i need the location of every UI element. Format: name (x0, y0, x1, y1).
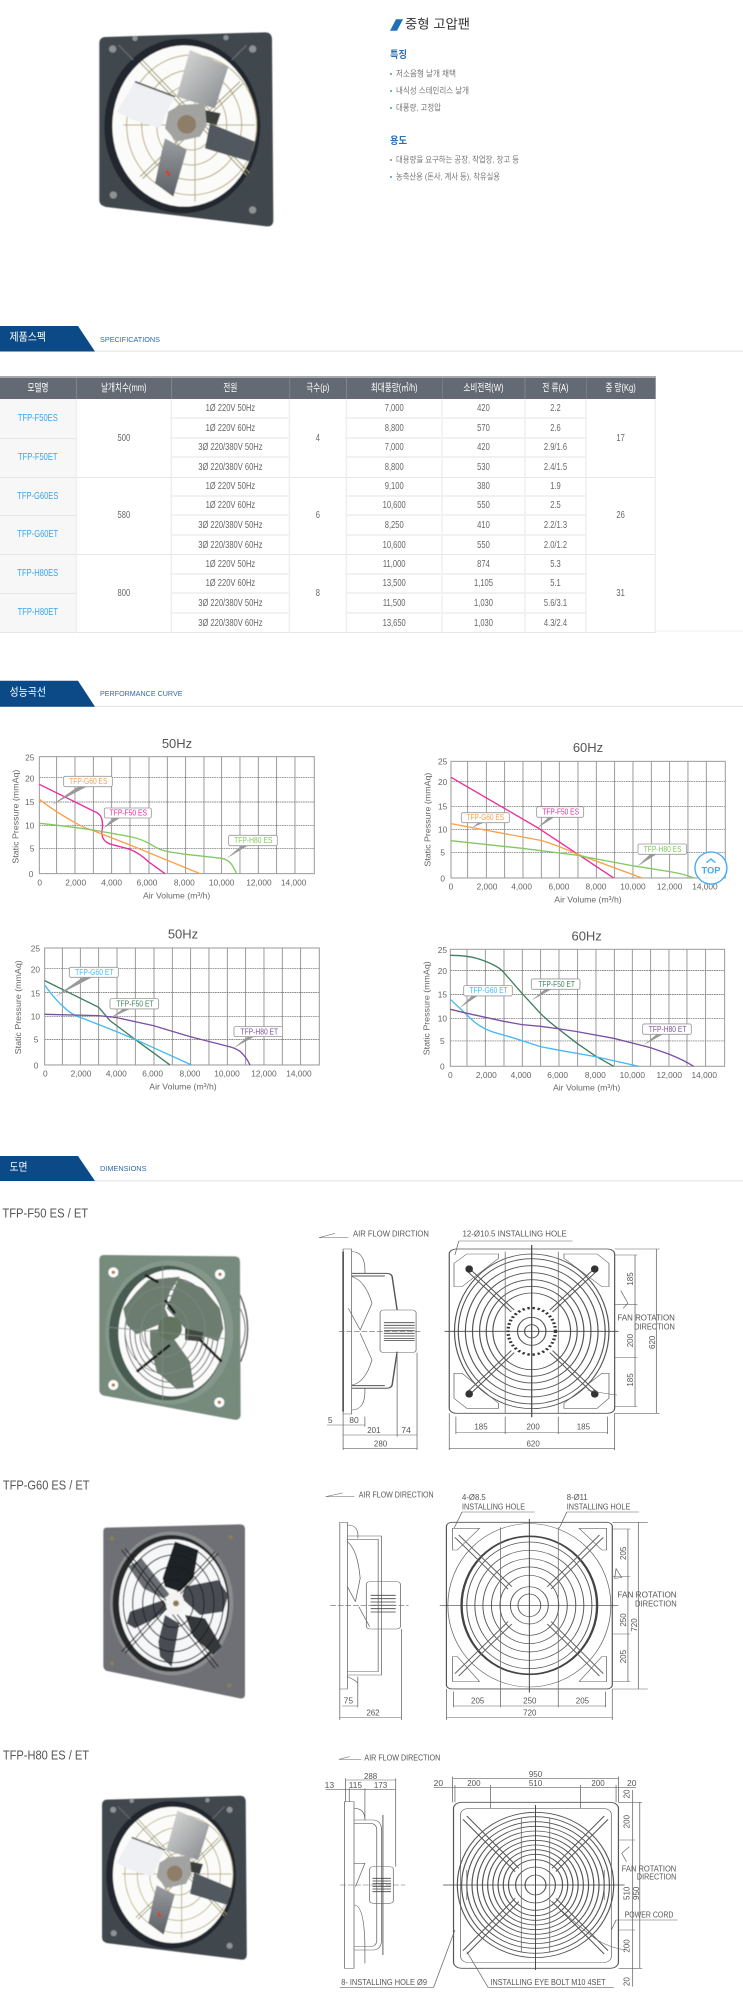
air flow label (339, 1754, 440, 1763)
front view drawing: 8- INSTALLING HOLE Ø9 (341, 1979, 427, 1987)
side view drawing: 280 (374, 1440, 387, 1449)
table header row: 4.3/2.4 (544, 616, 567, 628)
table header row: 최대풍량(㎥/h) (371, 382, 418, 394)
front view drawing: 950 (529, 1771, 542, 1779)
line chart: 60Hz ET: 20 (438, 966, 447, 976)
line chart: 60Hz ET: 4,000 (511, 1070, 532, 1080)
table header row: 11,500 (383, 597, 405, 609)
callout: TFP-F50 ET: TFP-F50 ET (538, 980, 575, 989)
line chart: 60Hz ET: 6,000 (547, 1070, 568, 1080)
front view drawing: 20 (621, 1789, 632, 1798)
line chart: 50Hz ES: 6,000 (137, 877, 158, 887)
side view drawing: 80 (349, 1416, 359, 1425)
section heading: specifications: SPECIFICATIONS (100, 335, 160, 344)
line chart: 60Hz ET (422, 928, 725, 1093)
callout: TFP-F50 ES (103, 808, 151, 828)
line chart: 60Hz ES: 60Hz (573, 740, 603, 755)
line chart: 60Hz ES: 5 (440, 848, 445, 858)
section heading: specifications (0, 326, 743, 352)
line chart: 60Hz ET: 10,000 (620, 1070, 645, 1080)
line chart: 50Hz ES: 12,000 (246, 877, 272, 887)
rows: TFP-F50: 420 (477, 402, 490, 414)
table header row: 3Ø 220/380V 60Hz (198, 538, 263, 550)
front view drawing: 720 (629, 1618, 639, 1632)
table header row: 3Ø 220/380V 50Hz (198, 519, 263, 531)
text block: applications: 용도 (390, 135, 407, 147)
callout: TFP-G60 ES (461, 813, 509, 828)
line chart: 60Hz ES: 14,000 (692, 881, 718, 891)
front view drawing: 205 (471, 1697, 485, 1706)
table header row: TFP-H80ET (18, 606, 58, 618)
line chart: 60Hz ET: 0 (448, 1070, 453, 1080)
model title: TFP-F50 ES / ET (2, 1207, 89, 1221)
line chart: 60Hz ES: 0 (449, 881, 454, 891)
front view drawing: 250 (523, 1697, 537, 1706)
front view drawing: 620 (647, 1336, 657, 1349)
table header row: 8,800 (385, 461, 404, 473)
line chart: 60Hz ET: 10 (438, 1013, 447, 1023)
line chart: 50Hz ES: 20 (25, 773, 35, 783)
side view drawing: 201 (367, 1426, 381, 1435)
table header row: 2.2/1.3 (544, 519, 567, 531)
table header row: 5.1 (550, 577, 561, 589)
table header row: 3Ø 220/380V 50Hz (198, 597, 263, 609)
rows: TFP-H80: TFP-H80ES (17, 567, 58, 579)
line chart: 50Hz ET: Static Pressure (mmAq) (13, 960, 23, 1054)
front view drawing: 4-Ø8.5 (462, 1494, 486, 1502)
front view drawing: 510 (621, 1887, 632, 1900)
table header row: 26 (616, 509, 625, 521)
side view drawing: 115 (349, 1782, 362, 1790)
line chart: 50Hz ES: 0 (29, 869, 34, 879)
rows: TFP-G60 (17, 480, 625, 521)
section heading: dimensions (0, 1156, 743, 1182)
table header row (0, 377, 656, 632)
rows: TFP-H80 (17, 558, 654, 632)
table header row: 1Ø 220V 60Hz (206, 422, 255, 434)
table header row: 550 (477, 538, 490, 550)
table header row: 550 (477, 499, 490, 511)
callout: TFP-G60 ES: TFP-G60 ES (69, 777, 107, 786)
table header row: 날개치수(mm) (101, 382, 147, 394)
rows: TFP-H80: 874 (477, 558, 490, 570)
line chart: 50Hz ES: 25 (25, 752, 35, 762)
front view drawing: 200 (467, 1780, 481, 1788)
front view drawing: INSTALLING HOLE (567, 1503, 630, 1512)
air flow label: AIR FLOW DIRECTION (359, 1491, 434, 1500)
divider: under table (0, 630, 743, 632)
front view drawing: 250 (618, 1613, 628, 1627)
front view drawing: 510 (529, 1780, 542, 1788)
front view drawing: 200 (625, 1334, 635, 1347)
front view drawing: INSTALLING EYE BOLT M10 4SET (490, 1979, 606, 1987)
button: TOP: TOP (701, 866, 720, 876)
side view drawing: 75 (344, 1697, 353, 1706)
line chart: 50Hz ES: 8,000 (174, 877, 195, 887)
line chart: 50Hz ET: Air Volume (m³/h) (149, 1082, 217, 1092)
table header row: 800 (118, 587, 130, 599)
front view drawing: 8-Ø11 (567, 1494, 588, 1502)
table header row: 1Ø 220V 60Hz (206, 499, 255, 511)
callout: TFP-F50 ES: TFP-F50 ES (542, 807, 579, 816)
side view drawing (325, 1773, 405, 1968)
front view drawing: 185 (625, 1272, 635, 1286)
rows: TFP-G60: 380 (477, 480, 490, 492)
line chart: 60Hz ES: 25 (438, 756, 448, 766)
front view drawing (340, 1771, 678, 1987)
callout: TFP-H80 ET: TFP-H80 ET (240, 1027, 278, 1036)
front view drawing: 950 (631, 1887, 641, 1900)
line chart: 50Hz ES: 2,000 (65, 877, 86, 887)
callout: TFP-H80 ES (227, 835, 277, 858)
line chart: 50Hz ET (13, 926, 319, 1092)
rows: TFP-H80: 1Ø 220V 50Hz (206, 558, 255, 570)
line chart: 50Hz ET: 10 (31, 1012, 40, 1022)
model title: TFP-G60 ES / ET (3, 1479, 90, 1493)
front view drawing: 205 (618, 1650, 628, 1663)
line chart: 50Hz ET: 0 (43, 1068, 48, 1078)
callout: TFP-H80 ET: TFP-H80 ET (649, 1025, 687, 1034)
callout: TFP-F50 ET (531, 979, 580, 1001)
table header row: 4 (316, 432, 320, 444)
air flow label (326, 1491, 434, 1500)
line chart: 50Hz ET: 4,000 (106, 1068, 127, 1078)
text block: applications: 대용량을 요구하는 공장, 작업장, 창고 등 (396, 155, 519, 165)
front view drawing: POWER CORD (625, 1911, 673, 1920)
front view drawing: 185 (474, 1423, 488, 1432)
table header row: 극수(p) (306, 382, 329, 394)
table header row: 1Ø 220V 60Hz (206, 577, 255, 589)
table header row: 전원 (223, 382, 237, 394)
line chart: 60Hz ES: 4,000 (511, 881, 532, 891)
front view drawing: 185 (625, 1373, 635, 1387)
front view drawing: 20 (621, 1977, 632, 1986)
line chart: 50Hz ES: 50Hz (162, 736, 192, 751)
line chart: 60Hz ES: 8,000 (586, 881, 607, 891)
callout: TFP-F50 ET (110, 999, 159, 1018)
table header row: 1,030 (474, 597, 493, 609)
line chart: 50Hz ET: 50Hz (168, 926, 198, 941)
callout: TFP-G60 ES: TFP-G60 ES (466, 813, 504, 822)
block: TFP-G60 dimensions (3, 1479, 677, 1720)
table header row: 420 (477, 441, 490, 453)
line chart: 50Hz ET: 6,000 (142, 1068, 163, 1078)
table header row: 2.4/1.5 (544, 461, 567, 473)
line chart: 60Hz ES: Static Pressure (mmAq) (422, 773, 432, 867)
callout: TFP-G60 ET: TFP-G60 ET (469, 986, 508, 995)
rows: TFP-F50 (18, 402, 625, 444)
section heading: performance curve: 성능곡선 (10, 685, 46, 698)
table header row: 2.6 (550, 422, 561, 434)
text block: features: 저소음형 날개 채택 (396, 68, 456, 78)
table header row: 10,600 (383, 538, 406, 550)
table header row: 500 (118, 432, 130, 444)
specification table (0, 376, 656, 633)
line chart: 60Hz ET: 5 (440, 1036, 445, 1046)
line chart: 60Hz ET: 0 (440, 1062, 445, 1072)
table header row: 13,500 (383, 577, 406, 589)
callout: TFP-H80 ES (637, 844, 687, 867)
line chart: 60Hz ES (422, 740, 725, 905)
line chart: 60Hz ES: 6,000 (549, 881, 570, 891)
table header row: TFP-G60ET (17, 528, 58, 540)
callout: TFP-G60 ET: TFP-G60 ET (75, 968, 114, 977)
line chart: 60Hz ET: 2,000 (476, 1070, 497, 1080)
line chart: 60Hz ES: 0 (440, 873, 445, 883)
air flow label: AIR FLOW DIRECTION (364, 1754, 440, 1763)
table header row: 7,000 (385, 441, 404, 453)
table header row: 8,250 (385, 519, 404, 531)
air flow label: AIR FLOW DIRCTION (353, 1230, 429, 1239)
table header row: 3Ø 220/380V 60Hz (198, 616, 263, 628)
rows: TFP-G60: 1.9 (550, 480, 561, 492)
table header row: 530 (477, 461, 490, 473)
table header row: 8 (316, 587, 320, 599)
line chart: 50Hz ET: 20 (31, 964, 40, 974)
table header row: 31 (616, 587, 625, 599)
callout: TFP-G60 ES (52, 776, 112, 805)
line chart: 50Hz ET: 5 (34, 1034, 39, 1044)
line chart: 50Hz ES: 5 (30, 844, 35, 854)
table header row: 580 (118, 509, 130, 521)
front view drawing (440, 1494, 677, 1720)
line chart: 60Hz ET: 15 (438, 990, 447, 1000)
front view drawing: 20 (434, 1780, 443, 1788)
front view drawing: 205 (618, 1547, 628, 1560)
line chart: 50Hz ET: 10,000 (214, 1068, 240, 1078)
callout: TFP-H80 ES: TFP-H80 ES (234, 836, 272, 845)
line chart: 50Hz ES: Air Volume (m³/h) (143, 890, 210, 900)
front view drawing: INSTALLING HOLE (462, 1503, 525, 1512)
front view drawing: 185 (577, 1423, 590, 1432)
text block: applications (390, 135, 519, 181)
table header row: 3Ø 220/380V 50Hz (198, 441, 263, 453)
front view drawing: FAN ROTATION (617, 1591, 677, 1600)
front view drawing: 200 (591, 1780, 605, 1788)
line chart: 50Hz ET: 2,000 (71, 1068, 92, 1078)
front view drawing: 620 (527, 1440, 540, 1449)
callout: TFP-F50 ET: TFP-F50 ET (116, 999, 154, 1008)
line chart: 60Hz ES: 15 (438, 801, 448, 811)
line chart: 60Hz ES: Air Volume (m³/h) (554, 895, 622, 905)
line chart: 50Hz ET: 12,000 (251, 1068, 277, 1078)
text block: features (390, 49, 469, 112)
line chart: 60Hz ES: 10 (438, 825, 448, 835)
side view drawing: 262 (366, 1709, 380, 1718)
table header row: 1,030 (474, 616, 493, 628)
rows: TFP-G60: 1Ø 220V 50Hz (206, 480, 255, 492)
line chart: 60Hz ES: 10,000 (620, 881, 646, 891)
front view drawing: 200 (527, 1423, 540, 1432)
image: green fan photo (99, 1255, 248, 1420)
rows: TFP-F50: 7,000 (385, 402, 404, 414)
callout: TFP-G60 ET (459, 986, 512, 1008)
side view drawing: 74 (401, 1426, 411, 1435)
front view drawing: 200 (621, 1939, 632, 1953)
front view drawing: 200 (621, 1815, 632, 1828)
table header row: 5.6/3.1 (544, 597, 567, 609)
front view drawing: 12-Ø10.5 INSTALLING HOLE (463, 1230, 567, 1239)
line chart: 60Hz ES: 20 (438, 777, 448, 787)
front view drawing: 20 (627, 1780, 637, 1788)
table header row: 전 류(A) (542, 382, 569, 394)
side view drawing: 13 (325, 1782, 334, 1790)
table header row: 570 (477, 422, 490, 434)
callout: TFP-H80 ES: TFP-H80 ES (644, 845, 682, 854)
table header row: 410 (477, 519, 490, 531)
rows: TFP-G60: 9,100 (385, 480, 404, 492)
text block: features: 내식성 스테인리스 날개 (396, 85, 469, 95)
side view drawing: 288 (364, 1773, 377, 1781)
text block: features: 대풍량, 고정압 (396, 102, 441, 112)
line chart: 60Hz ET: 8,000 (585, 1070, 606, 1080)
line chart: 50Hz ES: 10,000 (209, 877, 235, 887)
image: grey fan photo (103, 1524, 245, 1698)
line chart: 60Hz ET: Static Pressure (mmAq) (422, 961, 432, 1055)
line chart: 50Hz ES: 10 (25, 821, 35, 831)
section heading: specifications: 제품스펙 (10, 330, 46, 343)
table header row: 6 (316, 509, 320, 521)
side view drawing: 173 (374, 1782, 387, 1790)
front view drawing: DIRECTION (637, 1873, 676, 1882)
air flow label (319, 1230, 429, 1239)
front view drawing: FAN ROTATION (617, 1314, 675, 1323)
table header row: 중 량(Kg) (605, 382, 636, 394)
text block: applications: 농축산용 (돈사, 계사 등), 착유실용 (396, 171, 500, 181)
image: black fan photo (99, 32, 273, 226)
line chart: 50Hz ET: 25 (31, 943, 40, 953)
text block: features: 특징 (390, 49, 407, 61)
side view drawing (330, 1522, 409, 1720)
section heading: performance curve: PERFORMANCE CURVE (100, 689, 182, 698)
rows: TFP-F50: 1Ø 220V 50Hz (206, 402, 255, 414)
callout: TFP-F50 ES: TFP-F50 ES (110, 808, 147, 817)
rows: TFP-F50: 2.2 (550, 402, 561, 414)
line chart: 50Hz ET: 14,000 (286, 1068, 312, 1078)
line chart: 50Hz ES: 15 (25, 797, 35, 807)
table header row: 모델명 (28, 382, 48, 394)
callout: TFP-G60 ET (55, 967, 118, 997)
line chart: 60Hz ET: 25 (438, 945, 447, 955)
line chart: 50Hz ES: Static Pressure (mmAq) (11, 770, 21, 864)
image: black fan photo, smaller (102, 1796, 247, 1960)
line chart: 60Hz ES: 12,000 (657, 881, 683, 891)
product title: 중형 고압팬 (405, 16, 470, 32)
table header row: 10,600 (383, 499, 406, 511)
front view drawing: 205 (576, 1697, 589, 1706)
table header row: 소비전력(W) (463, 382, 503, 394)
line chart: 60Hz ET: Air Volume (m³/h) (553, 1083, 620, 1093)
line chart: 60Hz ET: 14,000 (692, 1070, 717, 1080)
rows: TFP-G60: TFP-G60ES (17, 490, 58, 502)
line chart: 60Hz ES: 2,000 (477, 881, 498, 891)
section heading: dimensions: DIMENSIONS (100, 1164, 146, 1173)
table header row: 2.5 (550, 499, 561, 511)
line chart: 50Hz ES (11, 736, 314, 900)
table header row: TFP-F50ET (18, 451, 58, 463)
table header row: 3Ø 220/380V 60Hz (198, 461, 263, 473)
front view drawing: DIRECTION (634, 1323, 675, 1332)
side view drawing (327, 1249, 422, 1450)
model title: TFP-H80 ES / ET (3, 1749, 89, 1763)
line chart: 60Hz ET: 12,000 (657, 1070, 682, 1080)
icon: title slash (390, 19, 403, 31)
front view drawing: 720 (523, 1709, 537, 1718)
table header row: 1,105 (474, 577, 493, 589)
callout: TFP-F50 ES (537, 807, 584, 828)
front view drawing: FAN ROTATION (622, 1865, 676, 1874)
rows: TFP-H80: 11,000 (383, 558, 405, 570)
button: TOP (695, 852, 727, 884)
callout: TFP-H80 ET (233, 1027, 283, 1048)
side view drawing: 5 (328, 1416, 333, 1425)
line chart: 50Hz ET: 15 (31, 988, 40, 998)
line chart: 60Hz ET: 60Hz (571, 928, 602, 943)
line chart: 50Hz ES: 14,000 (281, 877, 307, 887)
line chart: 50Hz ET: 0 (34, 1060, 39, 1070)
line chart: 50Hz ET: 8,000 (180, 1068, 201, 1078)
table header row: 17 (616, 432, 625, 444)
front view drawing: DIRECTION (635, 1600, 677, 1609)
callout: TFP-H80 ET (643, 1024, 691, 1045)
table header row: 2.9/1.6 (544, 441, 567, 453)
line chart: 50Hz ES: 4,000 (101, 877, 122, 887)
table header row: 2.0/1.2 (544, 538, 567, 550)
front view drawing (445, 1230, 675, 1450)
table header row: 13,650 (383, 616, 406, 628)
table header row: 8,800 (385, 422, 404, 434)
rows: TFP-H80: 5.3 (550, 558, 561, 570)
block: TFP-H80 dimensions (3, 1749, 678, 1987)
line chart: 50Hz ES: 0 (37, 877, 42, 887)
block: TFP-F50 dimensions (2, 1207, 675, 1450)
rows: TFP-F50: TFP-F50ES (18, 412, 58, 424)
section heading: performance curve (0, 681, 743, 707)
section heading: dimensions: 도면 (10, 1160, 28, 1173)
